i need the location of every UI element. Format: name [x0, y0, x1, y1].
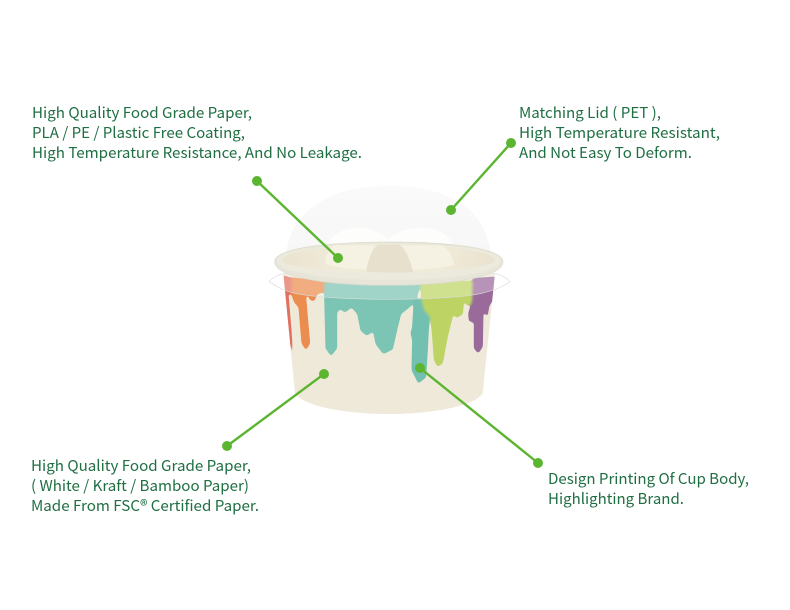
- drips: [282, 275, 495, 383]
- leader line: coating: [252, 176, 343, 263]
- dome reflections: [325, 245, 454, 271]
- text block: paper: High Quality Food Grade Paper,: [31, 455, 251, 476]
- cup interior: [283, 245, 495, 273]
- cup body: [283, 273, 495, 414]
- text block: printing: Highlighting Brand.: [548, 488, 684, 509]
- drip: teal long: [411, 299, 432, 383]
- text block: paper: Made From FSC® Certified Paper.: [31, 495, 259, 516]
- dome centre shadow: [366, 245, 413, 273]
- lid dome: [286, 186, 491, 255]
- text block: lid: High Temperature Resistant,: [519, 122, 720, 143]
- text block: coating: High Temperature Resistance, And No Leakage.: [32, 142, 362, 163]
- drip: purple: [468, 277, 495, 353]
- drip: red: [284, 276, 294, 350]
- drip: teal wide: [324, 283, 421, 356]
- text block: printing: [548, 468, 749, 509]
- text block: printing: Design Printing Of Cup Body,: [548, 468, 749, 489]
- text block: coating: High Quality Food Grade Paper,: [32, 102, 252, 123]
- text block: lid: [519, 102, 720, 163]
- text block: paper: ( White / Kraft / Bamboo Paper): [31, 475, 249, 496]
- text block: lid: And Not Easy To Deform.: [519, 142, 692, 163]
- leader line: paper: [222, 369, 329, 451]
- rim highlight: [277, 243, 501, 280]
- leader line: printing: [415, 363, 543, 468]
- text block: coating: PLA / PE / Plastic Free Coating,: [32, 122, 245, 143]
- cup rim: [275, 242, 503, 285]
- text block: lid: Matching Lid ( PET ),: [519, 102, 661, 123]
- drip: green: [421, 281, 474, 367]
- dome highlights: [325, 228, 455, 250]
- text block: paper: [31, 455, 259, 516]
- lid flange: [269, 268, 510, 299]
- leader line: lid: [446, 138, 516, 215]
- text block: coating: [32, 102, 362, 163]
- product: cup with dome lid: [269, 239, 510, 414]
- drip: orange: [291, 277, 334, 350]
